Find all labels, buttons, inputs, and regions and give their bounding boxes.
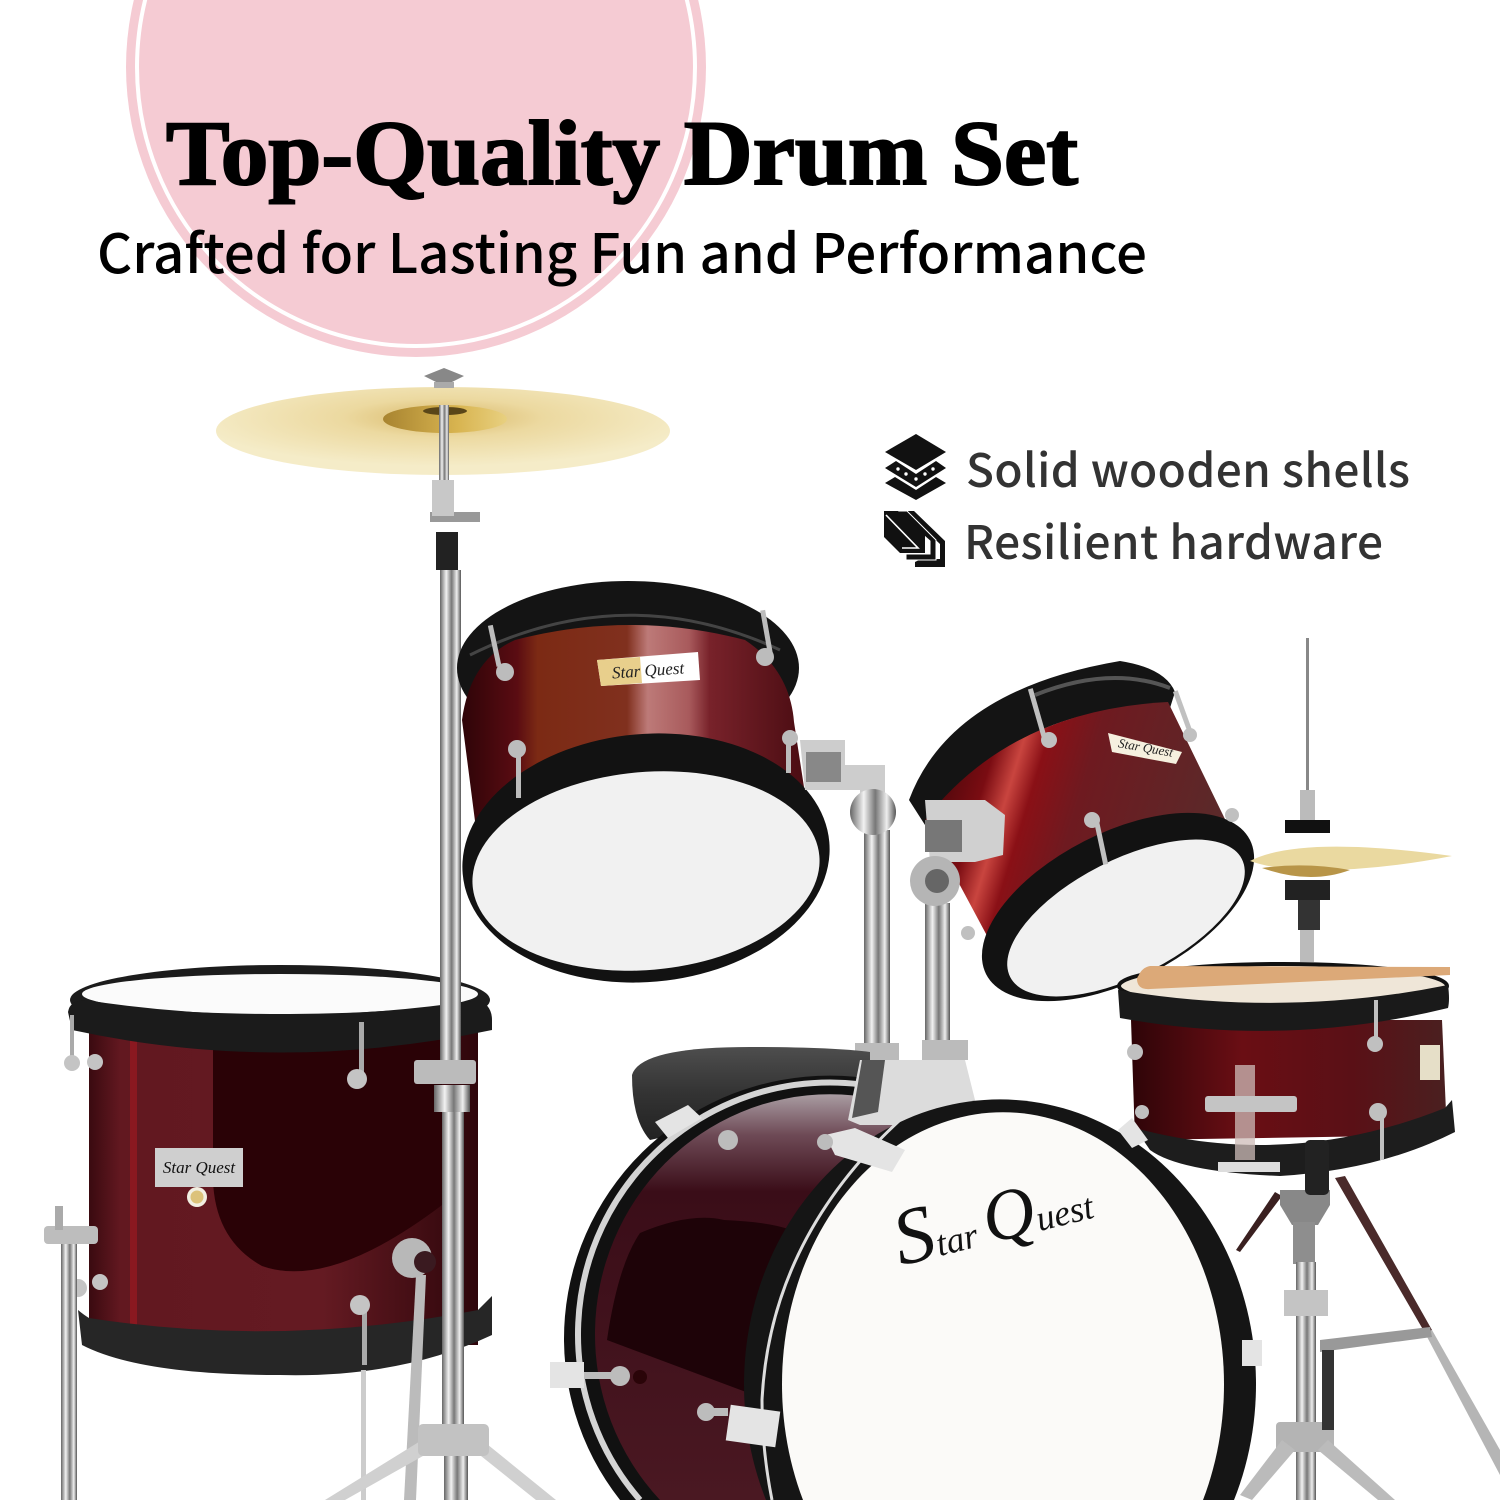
tom bracket [910, 800, 1005, 906]
left rack tom: Star Quest [611, 658, 686, 682]
feature: resilient hardware: Resilient hardware [964, 507, 1383, 573]
snare drum [1118, 964, 1455, 1195]
floor tom [64, 965, 492, 1375]
tom mount [800, 740, 968, 1063]
icon: metal plates [884, 511, 945, 567]
right rack tom: Star Quest [1117, 735, 1175, 760]
title: Top-Quality Drum Set [166, 102, 1078, 204]
floor tom: Star Quest [163, 1158, 236, 1177]
feature: solid wooden shells: Solid wooden shells [966, 435, 1410, 501]
floor tom legs [44, 1206, 436, 1500]
crash cymbal [216, 368, 670, 475]
pink circle [126, 0, 706, 357]
subtitle: Crafted for Lasting Fun and Performance [97, 210, 1147, 289]
cymbal stand [325, 405, 556, 1500]
bass drum logo: Star Quest [884, 1149, 1101, 1283]
bass drum [550, 1060, 1262, 1500]
hi-hat [1250, 638, 1452, 962]
left rack tom [452, 581, 840, 998]
drum throne [632, 1047, 870, 1140]
snare stand [1236, 1176, 1500, 1500]
icon: layers [885, 434, 946, 500]
right rack tom [909, 661, 1283, 1040]
